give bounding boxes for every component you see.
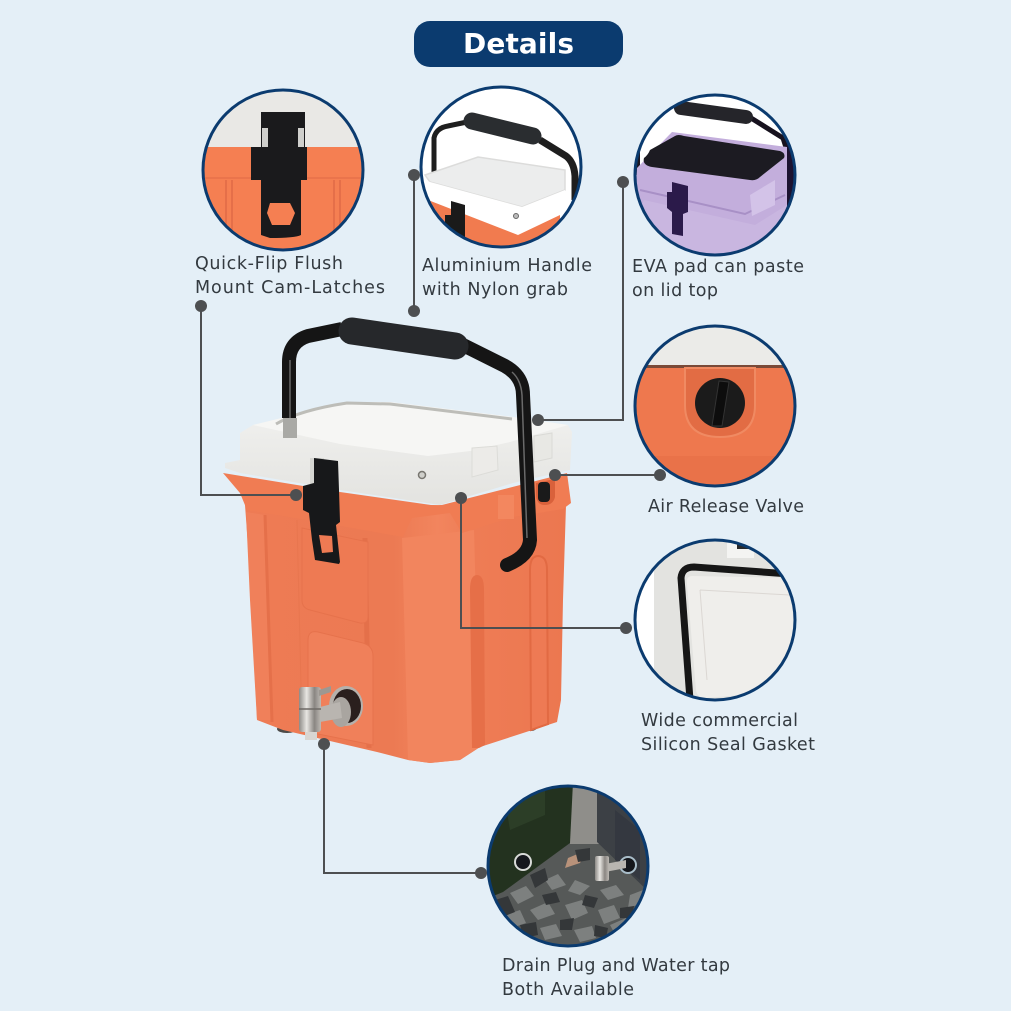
callout: drain plug and water tap: Both Available (502, 980, 634, 1000)
gravel stones (505, 874, 643, 942)
callout: cam-latches (195, 88, 385, 298)
connector: gasket (455, 492, 632, 634)
icon: gasket detail circle (636, 542, 794, 698)
cooler body (245, 505, 566, 763)
icon: EVA pad detail circle (636, 96, 794, 254)
icon: valve detail circle (636, 328, 794, 484)
water tap (299, 686, 363, 740)
label: Drain Plug and Water tap (502, 956, 730, 976)
main product: orange cooler (223, 329, 572, 763)
callout: EVA pad: on lid top (632, 281, 718, 301)
air valve hole on body (536, 479, 555, 505)
label: Wide commercial (641, 711, 798, 731)
body lip (223, 473, 571, 537)
callout: cam-latches: Mount Cam-Latches (195, 278, 385, 298)
label: EVA pad can paste (632, 257, 804, 277)
callout: handle (418, 84, 592, 300)
callout: handle: with Nylon grab (422, 280, 568, 300)
icon: handle detail circle (422, 88, 580, 246)
handle with grip (289, 329, 530, 565)
connector: air valve (549, 469, 666, 481)
lid tab on body (498, 495, 514, 519)
connector: drain (318, 738, 487, 879)
title: Details: Details (463, 27, 574, 60)
cooler feet (277, 723, 537, 733)
callout: EVA pad (632, 92, 804, 301)
connector: latch (195, 300, 302, 501)
icon: latch detail circle (204, 92, 362, 248)
callout: seal gasket (630, 536, 815, 755)
connector lines and dots (195, 169, 666, 879)
label: Quick-Flip Flush (195, 254, 343, 274)
callout: air release valve (630, 323, 804, 517)
title: Details (414, 21, 623, 67)
callout: seal gasket: Silicon Seal Gasket (641, 735, 815, 755)
latch (303, 458, 340, 564)
icon: drain detail circle (490, 788, 646, 944)
cooler lid (225, 402, 572, 505)
label: Air Release Valve (648, 497, 804, 517)
callout: drain plug and water tap (484, 782, 730, 1000)
connector: EVA pad (532, 176, 629, 426)
connector: handle (408, 169, 420, 317)
label: Aluminium Handle (422, 256, 592, 276)
